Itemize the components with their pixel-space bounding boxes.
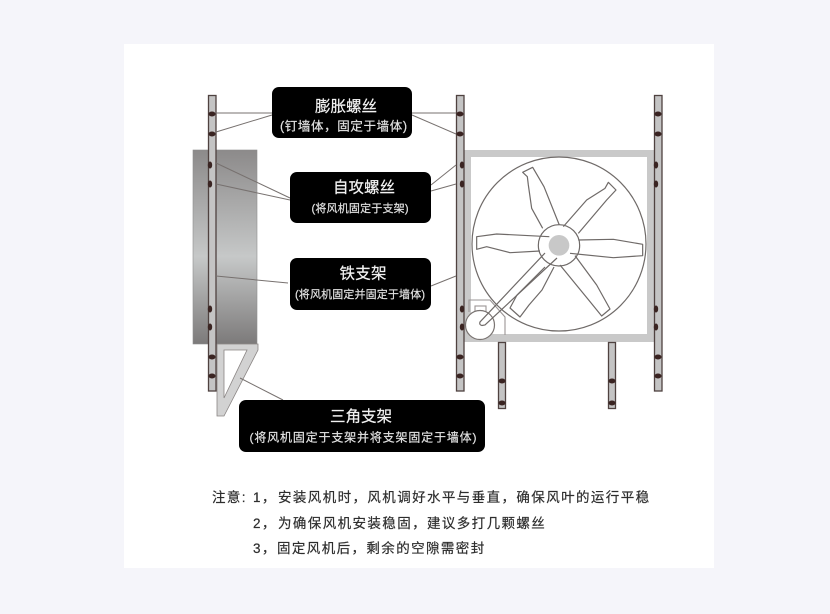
callout: self-tapping screws xyxy=(290,172,431,223)
callout: self-tapping screws: (将风机固定于支架) xyxy=(312,201,408,215)
installation notes: 安装风机时，风机调好水平与垂直，确保风叶的运行平稳 xyxy=(278,490,650,505)
far right wall post with screws xyxy=(654,96,662,391)
blade: lower right xyxy=(560,256,610,316)
blade: upper left xyxy=(523,167,559,228)
installation notes xyxy=(212,489,650,556)
callout: iron bracket: (将风机固定并固定于墙体) xyxy=(295,287,425,301)
right wall post with screws xyxy=(456,96,464,391)
callout: triangle bracket: 三角支架 xyxy=(330,408,392,426)
installation notes: 1， xyxy=(253,490,277,505)
installation notes: 2， xyxy=(253,516,277,531)
motor and drive belt xyxy=(466,253,557,340)
white panel xyxy=(124,44,714,568)
installation notes: 3， xyxy=(253,541,277,556)
leader lines xyxy=(216,113,456,400)
callout: iron bracket: 铁支架 xyxy=(340,264,386,282)
callout: expansion screws xyxy=(272,87,412,138)
side view of fan body xyxy=(193,150,257,344)
blade: right xyxy=(570,239,643,258)
blade: left xyxy=(477,234,549,253)
fan blades, guard circle and hub xyxy=(472,157,646,331)
left wall post with screws xyxy=(208,96,216,391)
callout: self-tapping screws: 自攻螺丝 xyxy=(333,178,395,196)
installation notes: 注意: xyxy=(212,489,247,505)
callout: triangle bracket xyxy=(239,400,485,452)
blade: upper right xyxy=(563,182,616,233)
callout: iron bracket xyxy=(290,258,431,310)
triangle bracket xyxy=(217,344,258,416)
installation notes: 固定风机后，剩余的空隙需密封 xyxy=(277,540,486,556)
lower support post right xyxy=(608,342,616,408)
callout: expansion screws: 膨胀螺丝 xyxy=(315,98,377,116)
callout: triangle bracket: (将风机固定于支架并将支架固定于墙体) xyxy=(250,430,476,444)
installation notes: 为确保风机安装稳固，建议多打几颗螺丝 xyxy=(278,515,546,531)
callout: expansion screws: (钉墙体，固定于墙体) xyxy=(280,118,407,134)
fan front frame xyxy=(464,150,654,342)
lower support post left xyxy=(498,342,506,408)
blade: lower left xyxy=(510,267,554,317)
